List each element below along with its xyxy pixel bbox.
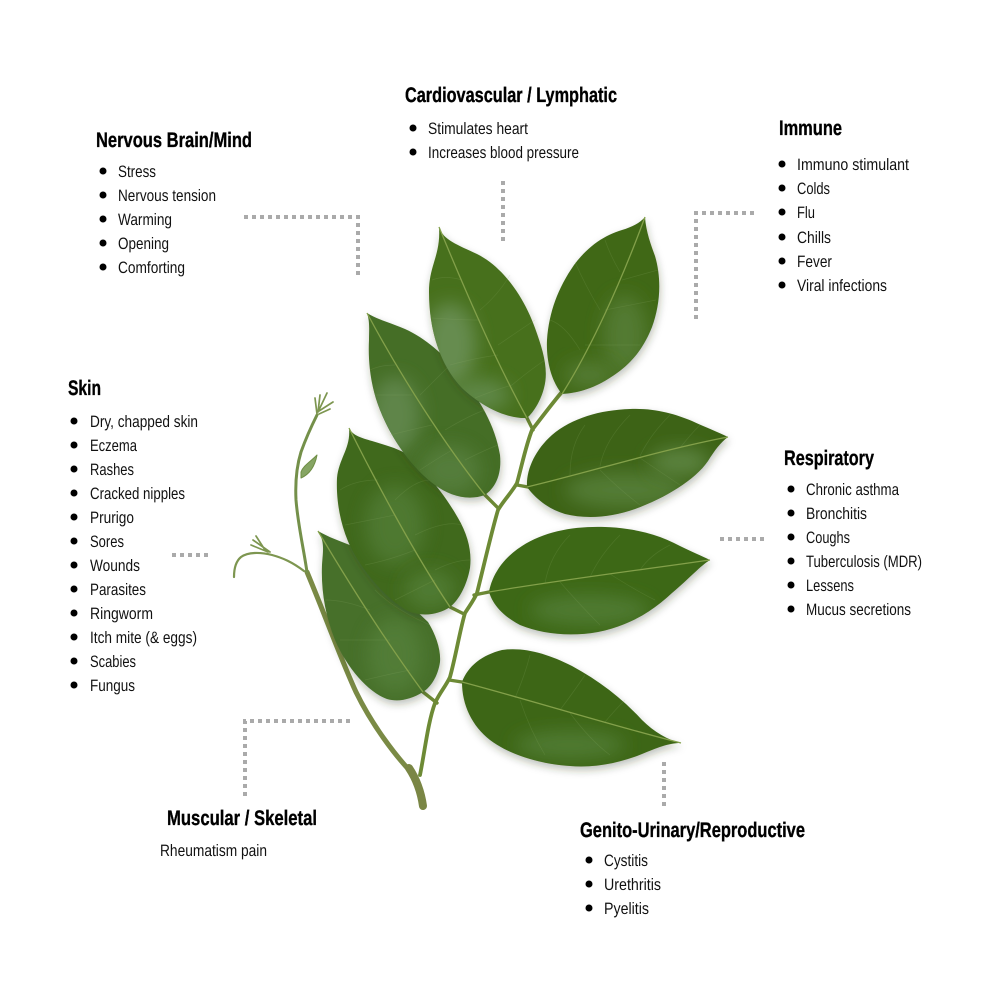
heading: Immune (779, 117, 842, 140)
bullet list: Rashes (90, 461, 134, 479)
bullet list (586, 852, 661, 918)
bullet list: Cracked nipples (90, 485, 185, 503)
bullet list: Fungus (90, 677, 135, 695)
bullet list: Itch mite (& eggs) (90, 629, 197, 647)
bullet list: Scabies (90, 653, 136, 671)
connector: genito-urinary (662, 762, 666, 806)
text block: Rheumatism pain (160, 842, 267, 860)
bullet list (410, 120, 579, 162)
bullet list: Parasites (90, 581, 146, 599)
bullet list: Comforting (118, 259, 185, 277)
bullet list: Pyelitis (604, 900, 649, 918)
bullet list: Urethritis (604, 876, 661, 894)
connector: nervous (244, 217, 358, 276)
heading: Muscular / Skeletal (167, 807, 317, 830)
bullet list: Increases blood pressure (428, 144, 579, 162)
panel: respiratory (784, 447, 922, 619)
heading: Nervous Brain/Mind (96, 129, 252, 152)
bullet list: Eczema (90, 437, 138, 455)
bullet list: Dry, chapped skin (90, 413, 198, 431)
bullet list: Cystitis (604, 852, 648, 870)
bullet list: Lessens (806, 577, 854, 595)
bullet list: Viral infections (797, 277, 887, 295)
heading: Respiratory (784, 447, 874, 470)
panel: cardiovascular / lymphatic (405, 84, 617, 162)
bullet list: Colds (797, 180, 830, 198)
connector: skin (172, 553, 208, 557)
connector: immune (696, 213, 754, 320)
stems (234, 393, 561, 806)
leaf: right middle (489, 527, 710, 634)
bullet list: Chills (797, 229, 831, 247)
bullet list: Stress (118, 163, 156, 181)
bullet list: Flu (797, 204, 815, 222)
bullet list: Chronic asthma (806, 481, 900, 499)
bullet list: Wounds (90, 557, 140, 575)
heading: Skin (68, 377, 101, 400)
bullet list: Opening (118, 235, 169, 253)
bullet list: Coughs (806, 529, 850, 547)
leaf: top middle (424, 227, 546, 418)
bullet list: Ringworm (90, 605, 153, 623)
panel: muscular / skeletal (160, 807, 317, 860)
bullet list: Fever (797, 253, 832, 271)
panel: skin (68, 377, 198, 695)
panel: nervous brain/mind (96, 129, 252, 277)
leaf: top right (547, 217, 659, 394)
bullet list: Tuberculosis (MDR) (806, 553, 922, 571)
bullet list: Bronchitis (806, 505, 867, 523)
bullet list: Prurigo (90, 509, 134, 527)
leaf: bottom right (462, 649, 681, 766)
leaf: lower left (318, 531, 440, 700)
panel: immune (778, 117, 909, 295)
panel: genito-urinary/reproductive (580, 819, 805, 918)
leaf: middle left (337, 428, 470, 614)
heading: Cardiovascular / Lymphatic (405, 84, 617, 107)
leaf: right upper (527, 409, 728, 517)
bullet list: Stimulates heart (428, 120, 528, 138)
bullet list (778, 156, 909, 295)
connector: respiratory (720, 537, 768, 541)
plant sprig (234, 217, 728, 806)
bullet list: Mucus secretions (806, 601, 911, 619)
bullet list: Immuno stimulant (797, 156, 909, 174)
bullet list (788, 481, 922, 619)
bullet list: Sores (90, 533, 124, 551)
bullet list (100, 163, 216, 277)
leaf: upper left (367, 313, 500, 498)
bullet list: Warming (118, 211, 172, 229)
connector: cardiovascular (501, 181, 505, 241)
heading: Genito-Urinary/Reproductive (580, 819, 805, 842)
connector: muscular (245, 721, 350, 796)
bullet list: Nervous tension (118, 187, 216, 205)
bullet list (70, 413, 198, 695)
